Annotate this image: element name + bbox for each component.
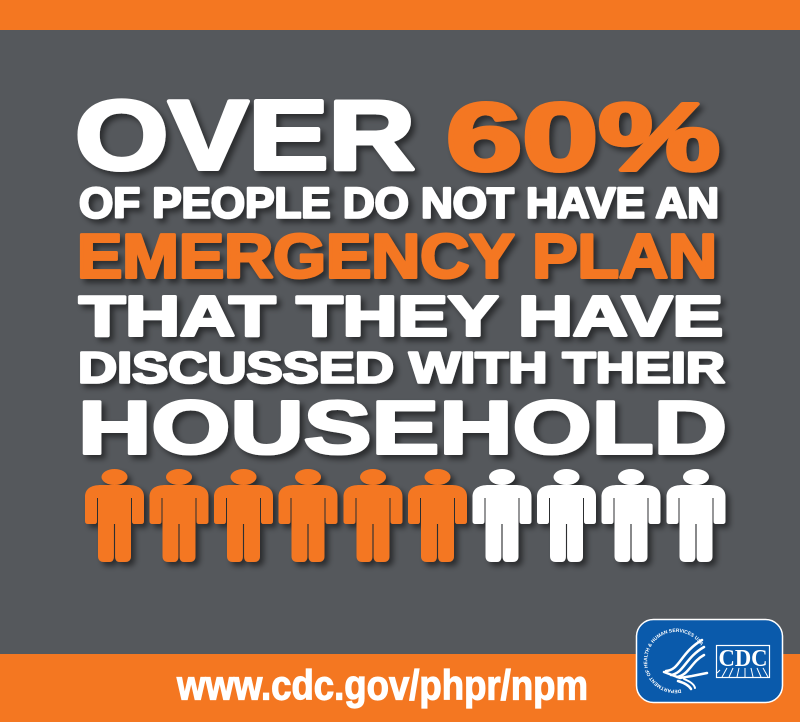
headline: of people do not have an: OF PEOPLE DO NOT HAVE AN — [79, 180, 719, 228]
icon: HHS seal — [644, 628, 708, 694]
headline — [75, 80, 727, 470]
headline: that they have: THAT THEY HAVE — [79, 284, 723, 348]
person 7 white — [472, 469, 532, 562]
headline: OVER: OVER — [75, 80, 415, 190]
person 1 orange — [85, 469, 144, 562]
person 6 orange — [408, 469, 467, 562]
logo badge: HHS and CDC — [636, 618, 784, 704]
headline: discussed with their: DISCUSSED WITH THEIR — [78, 344, 725, 393]
website url: www.cdc.gov/phpr/npm — [176, 662, 588, 708]
headline: emergency plan: EMERGENCY PLAN — [77, 222, 717, 292]
person 4 orange — [278, 469, 338, 562]
seal ring text: DEPARTMENT OF HEALTH & HUMAN SERVICES USA — [644, 628, 703, 694]
person 3 orange — [214, 469, 273, 562]
top orange band — [0, 0, 800, 30]
badge background — [636, 620, 782, 702]
pictogram: 6 of 10 people highlighted — [85, 469, 726, 562]
person 2 orange — [150, 469, 208, 562]
headline: household: HOUSEHOLD — [78, 386, 727, 470]
CDC wordmark: CDC — [718, 646, 768, 672]
person 5 orange — [344, 469, 402, 562]
headline: 60%: 60% — [446, 84, 720, 191]
person 8 white — [537, 469, 596, 562]
person 10 white — [666, 469, 726, 562]
bottom orange band — [0, 654, 800, 722]
icon: eagle — [664, 640, 707, 689]
CDC logo box — [716, 646, 770, 678]
person 9 white — [602, 469, 660, 562]
